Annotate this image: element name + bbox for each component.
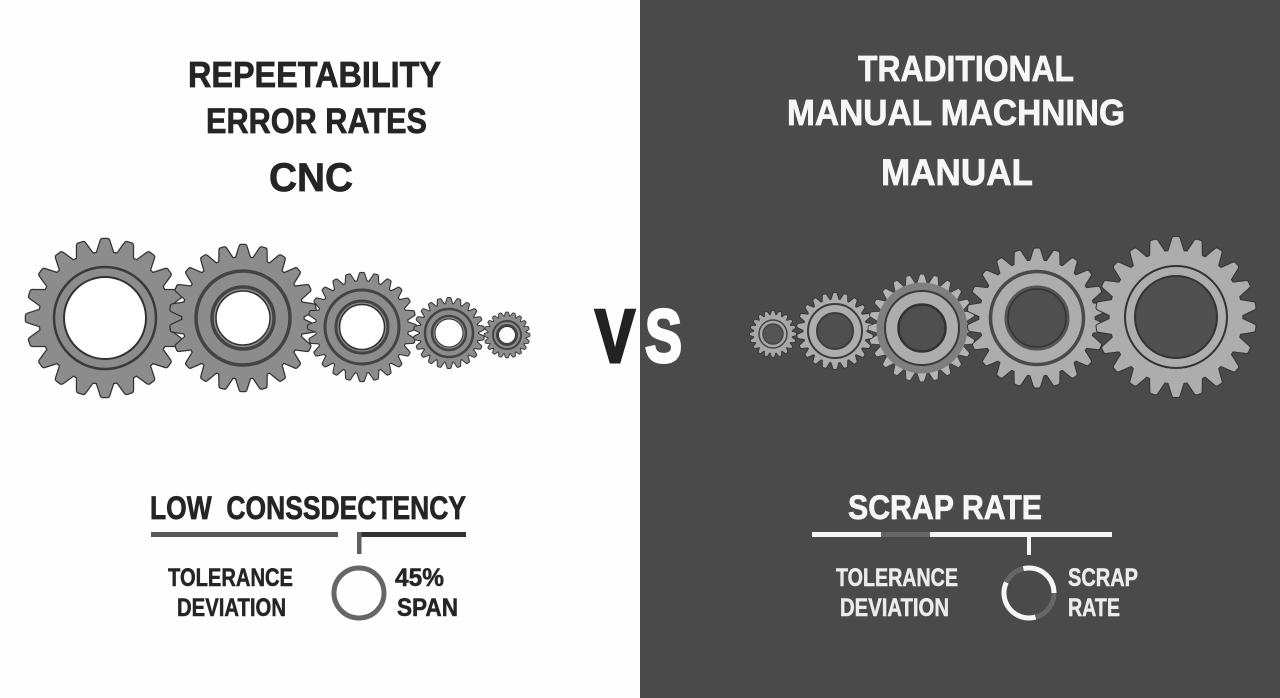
- panel: manual background: [640, 0, 1280, 698]
- panel: CNC: [26, 54, 530, 622]
- gear: fourth: [414, 298, 484, 368]
- gear: second: [797, 293, 873, 369]
- heading: traditional manual machining: MANUAL MACHNING: [787, 92, 1125, 133]
- subheading: scrap rate: SCRAP RATE: [848, 489, 1042, 527]
- gear: smallest: [484, 312, 530, 358]
- gear: fourth: [967, 248, 1107, 388]
- label: tolerance deviation: TOLERANCE: [168, 564, 293, 592]
- label: tolerance deviation: DEVIATION: [177, 594, 286, 622]
- connector lines: [812, 532, 1112, 555]
- heading: traditional manual machining: TRADITIONAL: [858, 48, 1074, 89]
- label: tolerance deviation: DEVIATION: [840, 594, 949, 622]
- gear: largest: [1096, 237, 1256, 397]
- heading: CNC repeatability: [188, 54, 441, 200]
- versus label: [595, 294, 682, 378]
- stat: scrap rate: [1068, 564, 1138, 622]
- gear: smallest: [750, 311, 796, 357]
- label: tolerance deviation: [168, 564, 293, 622]
- icon: progress ring: [334, 568, 384, 618]
- heading: CNC repeatability: REPEETABILITY: [188, 54, 441, 95]
- stat: scrap rate: SCRAP: [1068, 564, 1138, 592]
- heading: traditional manual machining: MANUAL: [881, 152, 1033, 193]
- panel: CNC background: [0, 0, 640, 698]
- gear: largest: [26, 239, 184, 397]
- heading: CNC repeatability: ERROR RATES: [206, 102, 427, 141]
- label: tolerance deviation: TOLERANCE: [836, 564, 958, 592]
- gear train: manual ascending: [750, 237, 1256, 397]
- stat: 45% span: 45%: [395, 564, 444, 592]
- stat: 45% span: [395, 564, 458, 622]
- heading: traditional manual machining: [787, 48, 1125, 193]
- versus label: V: [595, 294, 635, 378]
- icon: segmented ring: [1004, 568, 1054, 618]
- heading: CNC repeatability: CNC: [269, 156, 353, 200]
- gear train: CNC descending: [26, 239, 530, 397]
- connector lines: [151, 532, 466, 554]
- gear: second: [170, 245, 316, 391]
- stat: scrap rate: RATE: [1068, 594, 1120, 622]
- panel: manual: [750, 48, 1256, 622]
- gear: third: [868, 274, 976, 382]
- stat: 45% span: SPAN: [397, 594, 458, 622]
- label: tolerance deviation: [836, 564, 958, 622]
- subheading: low consistency: LOW CONSSDECTENCY: [150, 490, 466, 526]
- versus label: S: [645, 294, 682, 378]
- gear: third: [308, 273, 416, 381]
